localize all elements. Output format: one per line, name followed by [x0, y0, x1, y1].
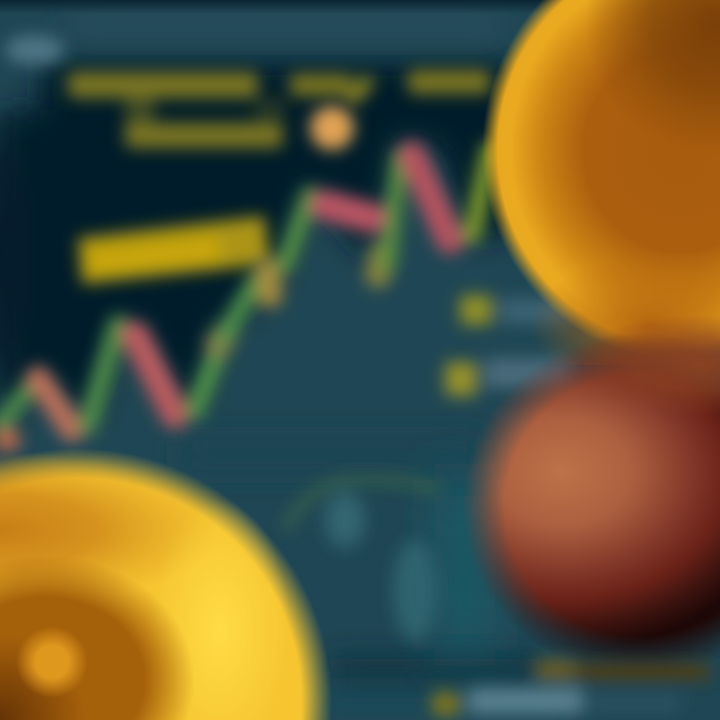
legend items	[445, 295, 575, 396]
top-left label	[5, 35, 65, 65]
highlighted label	[78, 216, 270, 284]
bottom-right caption	[432, 660, 710, 716]
title block	[68, 70, 490, 148]
glowing point	[310, 106, 354, 150]
coin: bottom left	[0, 445, 332, 720]
ball: bottom right	[455, 315, 720, 680]
coin: top right	[470, 0, 720, 365]
candlestick line	[0, 150, 490, 440]
lower chart detail	[285, 480, 440, 640]
